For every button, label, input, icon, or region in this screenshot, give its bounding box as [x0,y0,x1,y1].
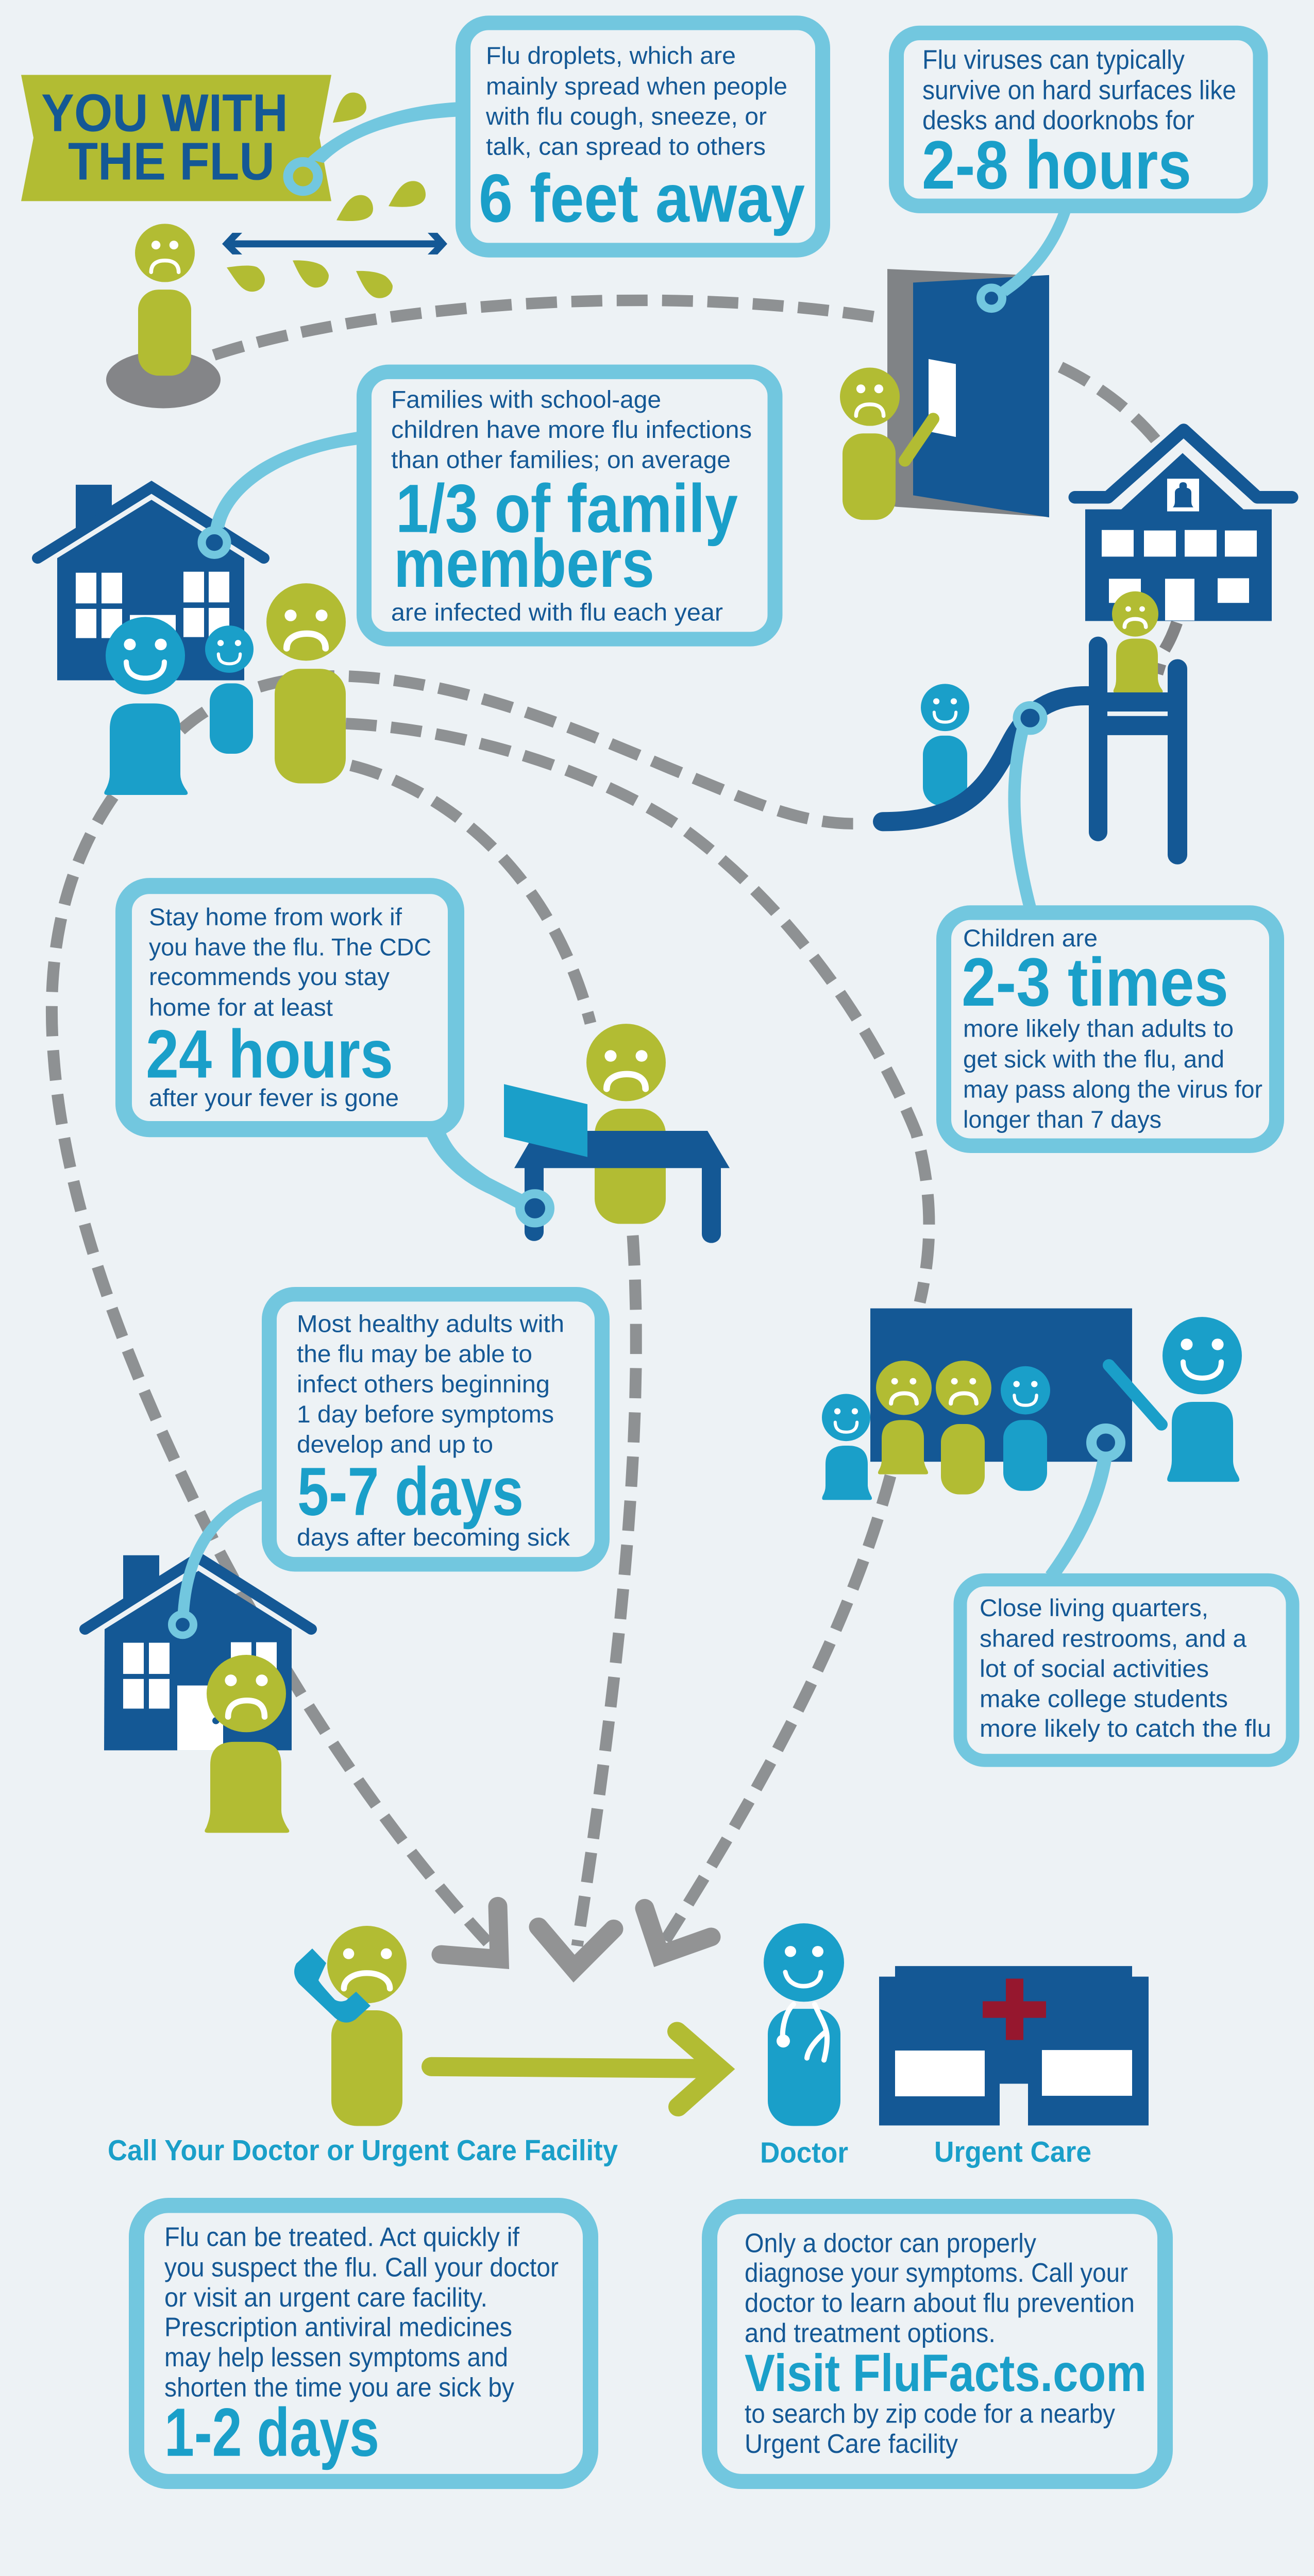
figure: student 3 sick [936,1361,991,1495]
title banner: THE FLU [68,132,275,191]
panel: droplets spread: 6 feet away [479,160,805,236]
figure: doctor [764,1923,844,2126]
arrow: six feet distance [222,233,447,255]
dashed path: door to school [1060,367,1157,441]
panel: families: 1/3 of family [396,470,738,547]
panel: only a doctor: to search by zip code for a nearby [745,2399,1116,2429]
figure: happy child by slide [921,684,969,806]
title banner [21,75,331,201]
figure: sick child on ladder [1112,591,1163,693]
callout tail: desk [426,1131,550,1223]
dashed path: first person to door [214,300,874,355]
panel: only a doctor: Urgent Care facility [745,2429,958,2459]
panel: only a doctor: Visit FluFacts.com [745,2343,1147,2402]
callout tail: door [981,210,1071,309]
panel: hard surfaces: survive on hard surfaces like [922,76,1236,105]
panel: only a doctor: diagnose your symptoms. Call your [745,2259,1128,2288]
figure: sick adult in family [266,583,346,784]
figure: happy adult in family [104,617,188,795]
callout tail: family house [202,431,360,555]
callout tail: slide [1014,705,1043,908]
panel: children: may pass along the virus for [963,1076,1262,1103]
panel: only a doctor: and treatment options. [745,2319,996,2348]
panel: droplets spread: mainly spread when people [486,73,787,100]
figure: happy child in family [205,625,254,754]
dashed path: work to call arrow [577,1235,636,1946]
panel: families: are infected with flu each year [391,599,723,626]
panel: families: members [394,525,654,602]
panel: children: get sick with the flu, and [963,1046,1224,1073]
home house [85,1555,311,1750]
panel: stay home: home for at least [149,994,333,1021]
panel: college: shared restrooms, and a [980,1625,1247,1652]
figure: student 1 [822,1394,872,1500]
panel: only a doctor [710,2207,1165,2482]
panel: droplets spread: with flu cough, sneeze, or [485,104,767,130]
panel: flu can be treated: shorten the time you are sick by [164,2373,515,2402]
panel: flu can be treated: may help lessen symptoms and [164,2343,508,2372]
panel: college [961,1580,1292,1760]
panel: droplets spread [463,23,822,250]
figure: sick person at desk [586,1024,666,1224]
panel: children: longer than 7 days [963,1107,1161,1133]
panel: droplets spread: talk, can spread to others [486,133,766,160]
panel: stay home [124,886,456,1129]
figure: teacher with pointer [1109,1317,1242,1482]
desk and laptop [504,1084,730,1243]
panel: healthy adults: infect others beginning [297,1371,550,1398]
panel: flu can be treated: or visit an urgent care facility. [164,2283,487,2313]
callout tail: home house [172,1494,266,1635]
label: doctor: Doctor [760,2137,848,2170]
panel: stay home: recommends you stay [149,963,390,991]
panel: college: more likely to catch the flu [980,1716,1271,1742]
school building [1075,430,1292,621]
panel: flu can be treated: Prescription antiviral medicines [164,2313,512,2342]
panel: flu can be treated: you suspect the flu. Call your doctor [164,2253,559,2282]
dashed path: family to home and to call arrow [52,796,488,1942]
panel: droplets spread: Flu droplets, which are [486,42,736,70]
label: call your doctor: Call Your Doctor or Urgent Care Facility [108,2134,618,2167]
panel: college: lot of social activities [980,1655,1209,1683]
panel: hard surfaces: desks and doorknobs for [922,106,1194,135]
dashed path: family to college [346,723,929,1302]
figure: sick person at home [205,1655,289,1833]
panel: stay home: Stay home from work if [149,904,402,931]
title banner: YOU WITH [41,83,288,143]
panel: healthy adults: Most healthy adults with [297,1311,564,1337]
figure: student 2 sick [876,1361,932,1475]
figure: student 4 [1001,1366,1050,1491]
panel: stay home: after your fever is gone [149,1085,399,1112]
panel: families [364,372,775,639]
dashed path: college to call arrow [665,1476,890,1940]
panel: flu can be treated: Flu can be treated. Act quickly if [164,2223,519,2252]
figure: sick person calling [294,1926,407,2126]
panel: children: Children are [963,925,1098,952]
panel: college: Close living quarters, [980,1595,1208,1622]
panel: healthy adults: develop and up to [297,1431,493,1459]
arrow: from college [645,1908,711,1955]
callout tail: droplets [288,102,459,191]
panel: only a doctor: Only a doctor can properly [745,2229,1037,2258]
arrow: from work [538,1927,614,1969]
dashed path: slide to family [181,676,857,824]
arrow: to doctor [431,2031,720,2107]
panel: hard surfaces: Flu viruses can typically [922,45,1185,75]
panel: healthy adults: the flu may be able to [297,1341,532,1368]
college board [870,1309,1132,1462]
callout tail: college [1051,1429,1120,1577]
panel: families: Families with school-age [391,386,661,413]
family house [38,485,264,681]
panel: children: 2-3 times [962,944,1228,1021]
panel: stay home: 24 hours [146,1016,393,1092]
panel: only a doctor: doctor to learn about flu prevention [745,2289,1135,2318]
urgent care building [879,1966,1149,2126]
panel: children [944,912,1277,1146]
playground slide and ladder [883,637,1187,865]
label: urgent care: Urgent Care [934,2136,1091,2168]
dashed path: family to work [351,765,591,1023]
panel: flu can be treated [137,2206,591,2482]
panel: hard surfaces: 2-8 hours [922,127,1191,204]
door [887,269,1049,517]
panel: college: make college students [980,1686,1228,1713]
panel: healthy adults: days after becoming sick [297,1524,570,1551]
arrow: from home [441,1906,499,1959]
figure: sick person on pedestal [106,224,221,409]
panel: healthy adults [269,1294,602,1564]
panel: families: than other families; on average [391,447,731,474]
panel: stay home: you have the flu. The CDC [149,934,431,961]
panel: hard surfaces [897,33,1260,206]
panel: children: more likely than adults to [963,1015,1234,1042]
panel: healthy adults: 5-7 days [297,1453,524,1530]
panel: families: children have more flu infections [391,417,752,444]
dashed path: school to slide [1157,622,1177,674]
figure: sick person at door [840,367,933,520]
panel: flu can be treated: 1-2 days [164,2394,379,2470]
icon: flu droplets [227,93,426,298]
panel: healthy adults: 1 day before symptoms [297,1401,554,1428]
